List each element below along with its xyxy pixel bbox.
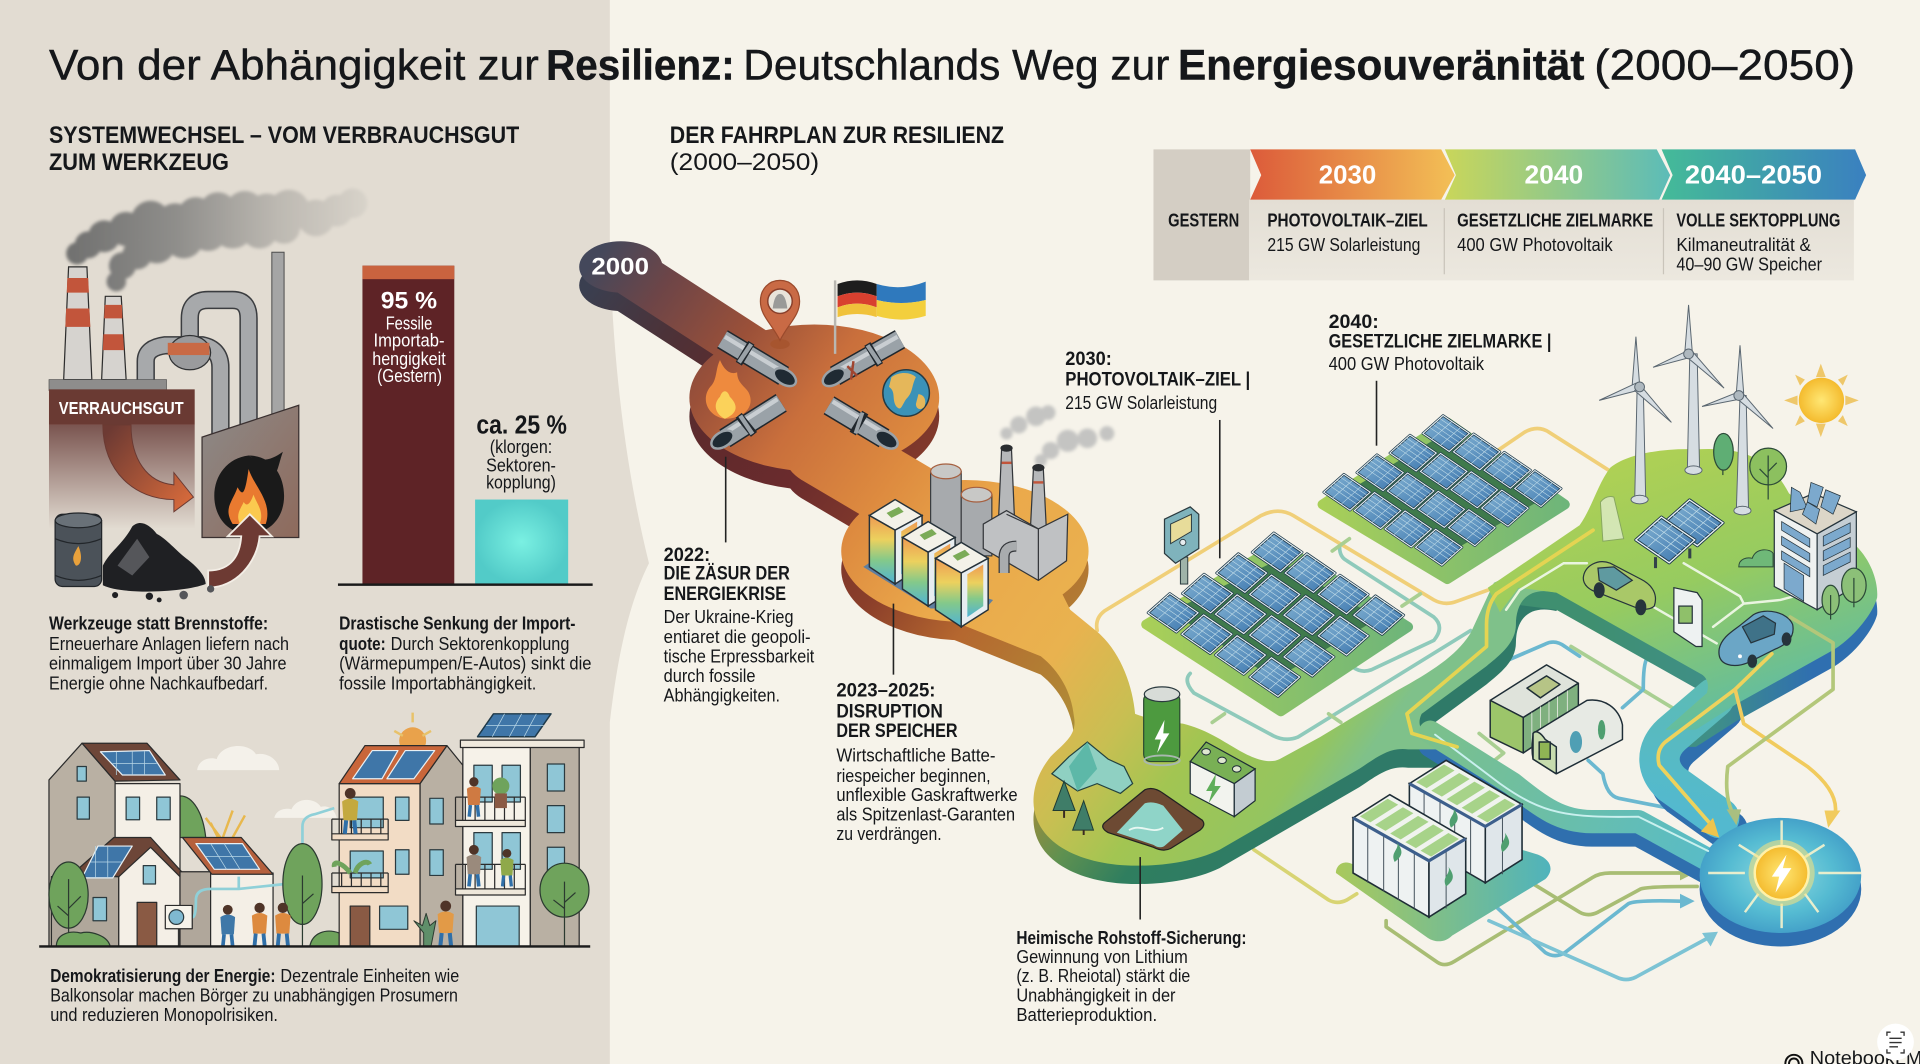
icon: globe (883, 370, 929, 416)
timeline table: GESTERN (1168, 210, 1239, 231)
bar: 95 percent (362, 266, 454, 584)
callout: 2023-2025: DISRUPTION (836, 701, 943, 722)
cylinders (931, 471, 961, 545)
power lines on top of road (1407, 530, 1840, 837)
house front left (51, 837, 186, 946)
callout: Rohstoff-Sicherung: Heimische Rohstoff-Sicherung: (1016, 927, 1247, 948)
consumable fade (49, 425, 195, 529)
trees (1053, 781, 1093, 830)
icon: flags (834, 280, 926, 354)
timeline table: VOLLE SEKTOPPLUNG (1676, 210, 1840, 231)
residents (220, 903, 291, 946)
roof slab (49, 380, 167, 391)
bar: 95 percent: hengigkeit (372, 348, 446, 369)
icon: office building (1774, 482, 1856, 610)
text block: Werkzeuge statt Brennstoffe: Werkzeuge statt Brennstoffe: (49, 612, 268, 633)
callout: 2022: ENERGIEKRISE (664, 584, 786, 605)
icon: hybrid containers (1490, 665, 1622, 774)
building peach (332, 713, 463, 946)
house tall left (49, 743, 180, 946)
heading: Fahrplan: (2000–2050) (670, 149, 819, 176)
callout: 2023-2025: Wirtschaftliche Batte- (836, 745, 996, 766)
icon: broken pipes (708, 337, 901, 452)
heading: Systemwechsel: ZUM WERKZEUG (49, 149, 229, 176)
bar: 25 percent: kopplung) (486, 472, 556, 493)
callout: 2023-2025: unflexible Gaskraftwerke (836, 784, 1018, 805)
callout: 2030: PHOTOVOLTAIK–ZIEL | (1065, 370, 1250, 391)
callout: 2022: durch fossile (664, 665, 756, 686)
callout: 2023-2025: zu verdrängen. (836, 823, 942, 844)
text block: Drastische Senkung: Durch Sektorenkopplung (391, 633, 569, 654)
icon: sun (1784, 364, 1859, 437)
thin stack (272, 252, 284, 414)
smoke plumes (1000, 405, 1114, 466)
clouds (197, 746, 337, 818)
smoke (66, 189, 367, 291)
illustration: village with prosumers (39, 713, 590, 948)
callout: Rohstoff-Sicherung: Gewinnung von Lithium (1016, 946, 1188, 967)
array: 2030 solar field (1146, 533, 1408, 711)
land road lines (1435, 563, 1794, 851)
text block: Drastische Senkung (339, 612, 591, 693)
chevron 2030: 2030 (1319, 162, 1376, 190)
icon: cloud bush (1739, 550, 1773, 567)
icon: flame (706, 360, 751, 419)
arrowheads (1680, 866, 1695, 880)
heading: Systemwechsel: SYSTEMWECHSEL – VOM VERBRAUCHSGUT (49, 122, 519, 149)
callout: 2022: 2022: (664, 545, 710, 566)
text block: Demokratisierung (50, 965, 459, 1025)
coal pile (103, 523, 206, 592)
lightning spark (206, 811, 245, 837)
callout: 2023-2025: riespeicher beginnen, (836, 765, 991, 786)
icon: battery towers (863, 500, 993, 627)
bar: 25 percent: Sektoren- (486, 454, 556, 475)
timeline table: PHOTOVOLTAIK–ZIEL (1267, 210, 1428, 231)
title: Energiesouveränität (1178, 42, 1584, 90)
array: battery racks (1336, 760, 1551, 941)
block battery (1190, 742, 1255, 784)
icon: hill solar panels (1636, 500, 1723, 568)
callout: 2040: 400 GW Photovoltaik (1329, 353, 1485, 374)
icon: energy hub sun (1708, 820, 1861, 928)
furnace (202, 405, 299, 538)
callout: 2040 (1329, 312, 1551, 446)
callout: 2030: 215 GW Solarleistung (1065, 392, 1217, 413)
label block: VERRAUCHSGUT (59, 398, 184, 418)
timeline table: 400 GW Photovoltaik (1457, 234, 1613, 255)
arrow: up (208, 514, 272, 588)
callout: Rohstoff-Sicherung: Batterieproduktion. (1016, 1004, 1157, 1025)
trees (49, 844, 339, 946)
callout: 2022: tische Erpressbarkeit (664, 645, 814, 666)
callout: 2022: DIE ZÄSUR DER (664, 564, 790, 585)
text block: Demokratisierung: Demokratisierung der Energie: (50, 965, 276, 986)
timeline table (1153, 149, 1866, 280)
icon: map pin (760, 280, 800, 349)
title: Von der Abhängigkeit zur (49, 42, 539, 90)
chimneys (998, 448, 1015, 533)
text block: Drastische Senkung: fossile Importabhängigkeit. (339, 672, 536, 693)
timeline table: Kilmaneutralität & (1676, 234, 1811, 255)
pipes (190, 300, 249, 429)
illustration: fossil factory (49, 189, 367, 602)
bar: 25 percent: ca. 25 % (476, 411, 567, 439)
text block: Werkzeuge statt Brennstoffe: Erneuerhare Anlagen liefern nach (49, 633, 289, 654)
callout: 2022: entiaret die geopoli- (664, 626, 811, 647)
power lines behind road (1097, 429, 1718, 980)
callout: Rohstoff-Sicherung: (z. B. Rheiotal) stärkt die (1016, 965, 1190, 986)
bush back (180, 796, 206, 837)
bar: 95 percent: Fessile (386, 312, 432, 333)
turbine 3 (1736, 395, 1749, 511)
text block: Demokratisierung: Dezentrale Einheiten wie (280, 965, 459, 986)
callout: 2023-2025: als Spitzenlast-Garanten (836, 803, 1015, 824)
chevron 2040 (1445, 149, 1670, 200)
bar: 25 percent (475, 411, 568, 584)
label block (49, 389, 195, 425)
icon: green car (1583, 562, 1655, 615)
icon: smart meter (1164, 507, 1199, 584)
timeline table: GESETZLICHE ZIELMARKE (1457, 210, 1653, 231)
building tall (456, 714, 589, 946)
mountain (1052, 742, 1133, 793)
turbine 1 (1635, 387, 1646, 500)
energy lines (192, 808, 334, 917)
callout: Rohstoff-Sicherung: Unabhängigkeit in der (1016, 985, 1176, 1006)
panel: left background (0, 0, 649, 1064)
callout: 2030 (1065, 349, 1250, 558)
roadmap path: top surface (579, 241, 1877, 933)
text block: Drastische Senkung: quote: (339, 633, 386, 654)
text block: Werkzeuge statt Brennstoffe: einmaligem Import über 30 Jahre (49, 653, 287, 674)
arrow: into furnace (103, 425, 193, 512)
solar meter box (165, 905, 192, 946)
heading: Systemwechsel (49, 122, 519, 176)
callout: 2023-2025 (836, 604, 1018, 844)
text block: Demokratisierung: Balkonsolar machen Börger zu unabhängigen Prosumern (50, 985, 458, 1006)
pit (1103, 789, 1204, 850)
roadmap path: side walls (579, 260, 1877, 946)
block (983, 511, 1068, 580)
timeline table: 215 GW Solarleistung (1267, 234, 1420, 255)
callout: Rohstoff-Sicherung (1016, 857, 1247, 1025)
bar: 95 percent: Importab- (373, 330, 444, 351)
callout: 2023-2025: 2023–2025: (836, 681, 936, 702)
array: 2040 solar field (1322, 415, 1565, 579)
callout: 2023-2025: DER SPEICHER (836, 721, 958, 742)
icon: trees on hill (1714, 433, 1787, 500)
cylinder battery (1144, 693, 1180, 762)
callout: 2022: Abhängigkeiten. (664, 685, 780, 706)
text block: Drastische Senkung: (Wärmepumpen/E-Autos) sinkt die (339, 653, 591, 674)
bar: 95 percent: (Gestern) (377, 365, 442, 386)
text block: Werkzeuge statt Brennstoffe (49, 612, 289, 693)
timeline table: 40–90 GW Speicher (1676, 254, 1822, 275)
year badge 2000: 2000 (591, 253, 649, 280)
text block: Drastische Senkung: Drastische Senkung der Import- (339, 612, 576, 633)
icon: wind turbines (1599, 305, 1773, 515)
barrel (55, 513, 102, 586)
callout: 2030: 2030: (1065, 349, 1112, 370)
bar: 25 percent: (klorgen: (490, 436, 552, 457)
icon: lithium mine and batteries (1052, 687, 1255, 850)
chevron 2040-2050 (1662, 149, 1866, 200)
bar: 95 percent: 95 % (381, 288, 437, 315)
chevron 2040: 2040 (1524, 162, 1583, 190)
house centre (180, 837, 273, 946)
icon: blue car (1719, 611, 1793, 667)
heading: Fahrplan (670, 122, 1004, 176)
turbine 2 (1687, 354, 1700, 470)
callout: 2040: 2040: (1329, 312, 1379, 333)
callout: 2022 (664, 457, 814, 706)
title: Resilienz: (546, 42, 735, 90)
title: Deutschlands Weg zur (743, 42, 1169, 90)
callout: 2040: GESETZLICHE ZIELMARKE | (1329, 332, 1551, 353)
callout: 2022: Der Ukraine-Krieg (664, 606, 793, 627)
heading: Fahrplan: DER FAHRPLAN ZUR RESILIENZ (670, 122, 1004, 149)
title (49, 42, 1855, 90)
icon: charging station (1674, 588, 1702, 646)
icon: scan button (1877, 1024, 1914, 1060)
chevron 2040-2050: 2040–2050 (1685, 162, 1822, 190)
title: (2000–2050) (1594, 42, 1855, 90)
bar chart: import dependency (338, 266, 593, 586)
icon: ghost charger (1600, 496, 1624, 541)
chevron 2030 (1250, 149, 1455, 200)
illustration: gas power plant (931, 405, 1114, 580)
chimneys (64, 267, 92, 380)
text block: Demokratisierung: und reduzieren Monopolrisiken. (50, 1004, 278, 1025)
icon: trees by building (1822, 568, 1866, 620)
text block: Werkzeuge statt Brennstoffe: Energie ohne Nachkaufbedarf. (49, 672, 268, 693)
balconies (332, 834, 388, 893)
